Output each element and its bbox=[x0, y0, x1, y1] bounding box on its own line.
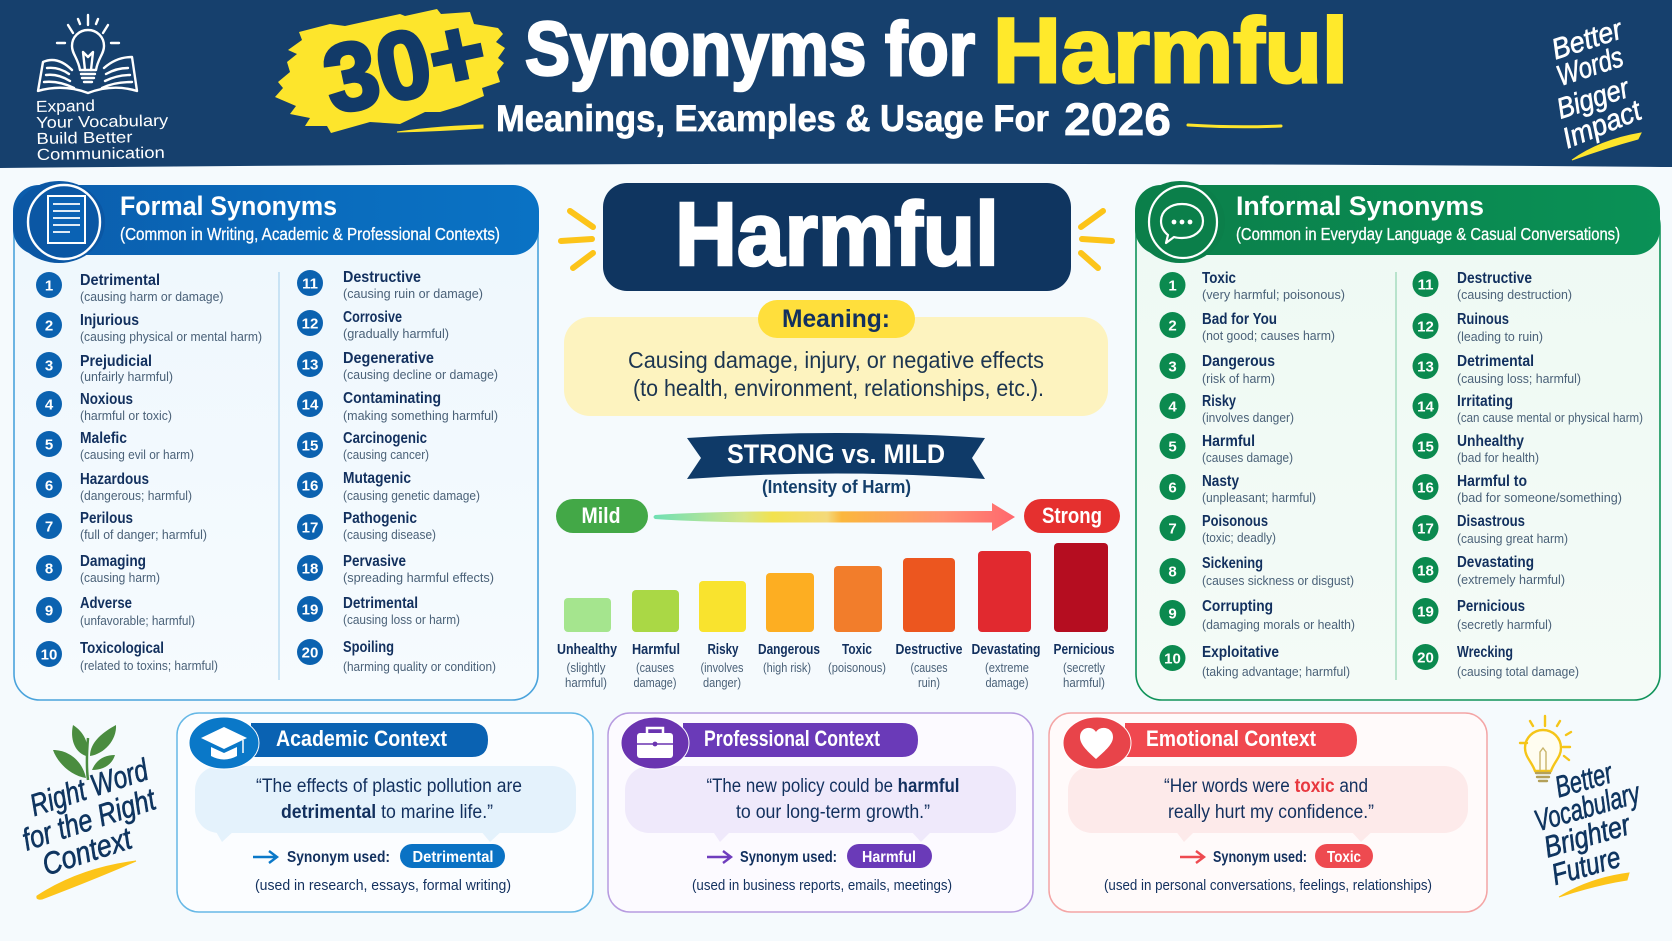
item 11: 11 bbox=[1418, 276, 1433, 294]
panel: meaning bbox=[564, 300, 1108, 416]
item 1: (very harmful; poisonous) bbox=[1202, 287, 1345, 302]
item 19 bbox=[297, 595, 460, 627]
title number: 30+ bbox=[315, 0, 495, 135]
item 10 bbox=[1160, 644, 1350, 679]
icon: speech bubble bbox=[1135, 181, 1225, 263]
heading: Academic Context bbox=[276, 726, 448, 751]
title text: Synonyms for bbox=[525, 7, 975, 92]
yellow brush highlight bbox=[275, 9, 505, 133]
slogan text: Better bbox=[1551, 756, 1617, 804]
bar: risky: danger) bbox=[703, 675, 741, 690]
slogan top right: Better bbox=[1548, 13, 1627, 66]
bar: destructive: Destructive bbox=[896, 641, 962, 658]
item 3: (unfairly harmful) bbox=[80, 369, 173, 384]
slogan top right: Impact bbox=[1558, 94, 1648, 155]
item 12: Corrosive bbox=[343, 309, 402, 326]
item 19 bbox=[1412, 598, 1552, 632]
meaning text bbox=[628, 347, 1044, 401]
bar: risky: (involves bbox=[700, 660, 744, 675]
item 3: Prejudicial bbox=[80, 353, 152, 370]
quote bbox=[256, 776, 522, 823]
arrow bbox=[707, 851, 731, 863]
speech bubble bbox=[1068, 766, 1468, 842]
item 4: Risky bbox=[1202, 393, 1236, 410]
synonym pill: Toxic bbox=[1327, 849, 1361, 866]
item 10: Exploitative bbox=[1202, 644, 1279, 661]
item 14: (making something harmful) bbox=[343, 408, 498, 423]
item 6: 6 bbox=[45, 478, 53, 494]
item 17: Pathogenic bbox=[343, 510, 417, 527]
item 4: (harmful or toxic) bbox=[80, 408, 172, 423]
item 15: (causing cancer) bbox=[343, 447, 429, 462]
item 16: 16 bbox=[1417, 480, 1434, 496]
item 20: (harming quality or condition) bbox=[343, 659, 496, 674]
item 2 bbox=[1160, 311, 1335, 343]
bar: toxic bbox=[828, 566, 886, 675]
item 9: (unfavorable; harmful) bbox=[80, 613, 195, 628]
item 5: Harmful bbox=[1202, 433, 1255, 450]
item 15: (bad for health) bbox=[1457, 450, 1539, 465]
item 13: Detrimental bbox=[1457, 353, 1534, 370]
item 16 bbox=[297, 470, 480, 503]
bar: devastating: (extreme bbox=[985, 660, 1029, 675]
slogan text bbox=[1531, 756, 1645, 892]
bar: harmful: (causes bbox=[636, 660, 674, 675]
item 13: 13 bbox=[1417, 358, 1434, 376]
quote: “Her words were toxic and bbox=[1164, 776, 1368, 797]
item 15 bbox=[297, 430, 429, 462]
item 1: 1 bbox=[45, 278, 53, 294]
icon: heart bbox=[1063, 717, 1131, 769]
item 18: 18 bbox=[302, 560, 318, 578]
slogan: right word bbox=[18, 725, 161, 899]
synonym pill bbox=[1315, 844, 1373, 868]
item 18: (spreading harmful effects) bbox=[343, 570, 494, 585]
item 9 bbox=[1160, 598, 1355, 632]
bar: risky bbox=[699, 581, 746, 690]
item 10 bbox=[36, 640, 218, 673]
item 18: Devastating bbox=[1457, 554, 1534, 571]
bar: dangerous: Dangerous bbox=[758, 641, 820, 658]
item 11: (causing ruin or damage) bbox=[343, 286, 483, 301]
item 12 bbox=[297, 309, 449, 341]
item 16: 16 bbox=[302, 478, 318, 494]
item 9: Adverse bbox=[80, 595, 132, 612]
item 6: (unpleasant; harmful) bbox=[1202, 490, 1316, 505]
item 19: 19 bbox=[1417, 604, 1434, 620]
item 17 bbox=[297, 510, 436, 542]
item 6: (dangerous; harmful) bbox=[80, 488, 192, 503]
bar: dangerous: (high risk) bbox=[763, 660, 811, 675]
item 2: (causing physical or mental harm) bbox=[80, 329, 262, 344]
informal heading: Informal Synonyms bbox=[1236, 191, 1484, 221]
gradient arrow bbox=[654, 503, 1015, 531]
item 11 bbox=[297, 269, 483, 301]
item 13: 13 bbox=[302, 356, 318, 374]
heading: Emotional Context bbox=[1146, 726, 1317, 751]
item 8: 8 bbox=[45, 560, 53, 578]
item 11: 11 bbox=[302, 276, 318, 292]
item 7: (full of danger; harmful) bbox=[80, 527, 207, 542]
meaning text: (to health, environment, relationships, etc.). bbox=[633, 375, 1044, 401]
item 10: 10 bbox=[41, 646, 57, 664]
item 3: (risk of harm) bbox=[1202, 371, 1275, 386]
quote: detrimental to marine life.” bbox=[281, 802, 493, 823]
item 7 bbox=[1160, 513, 1276, 545]
synonym pill: Detrimental bbox=[412, 849, 494, 866]
item 12: 12 bbox=[302, 316, 318, 332]
sparkle rays right bbox=[1081, 211, 1112, 268]
heading bar bbox=[251, 723, 488, 757]
bar: pernicious: Pernicious bbox=[1054, 641, 1114, 658]
meaning label: Meaning: bbox=[782, 305, 890, 333]
icon: briefcase bbox=[621, 717, 689, 769]
item 2: Injurious bbox=[80, 312, 139, 329]
speech bubble bbox=[625, 766, 1016, 842]
slogan text: Context bbox=[38, 820, 137, 882]
item 15: Carcinogenic bbox=[343, 430, 427, 447]
slogan text: for the Right bbox=[18, 781, 161, 857]
logo tagline: Build Better bbox=[36, 129, 133, 148]
item 2: Bad for You bbox=[1202, 311, 1277, 328]
synonym used label: Synonym used: bbox=[1213, 849, 1307, 866]
item 19: (secretly harmful) bbox=[1457, 617, 1552, 632]
item 13: Degenerative bbox=[343, 350, 434, 367]
item 10: Toxicological bbox=[80, 640, 164, 657]
item 14: (can cause mental or physical harm) bbox=[1457, 410, 1643, 425]
item 11: (causing destruction) bbox=[1457, 287, 1572, 302]
item 4: (involves danger) bbox=[1202, 410, 1294, 425]
header banner bbox=[0, 0, 1672, 168]
item 14: Irritating bbox=[1457, 393, 1513, 410]
item 13 bbox=[297, 350, 498, 382]
item 9: 9 bbox=[1168, 606, 1177, 622]
quote: to our long-term growth.” bbox=[736, 802, 930, 823]
bar: unhealthy: harmful) bbox=[565, 675, 607, 690]
bar: unhealthy: (slightly bbox=[566, 660, 606, 675]
formal heading: Formal Synonyms bbox=[120, 191, 337, 221]
item 8: (causing harm) bbox=[80, 570, 160, 585]
item 20: 20 bbox=[302, 644, 318, 662]
arrow bbox=[253, 851, 277, 863]
heading bar bbox=[683, 723, 918, 757]
bar: toxic: (poisonous) bbox=[828, 660, 886, 675]
icon: yellow bulb bbox=[1520, 716, 1571, 781]
panel: center headword bbox=[561, 183, 1112, 291]
item 1 bbox=[1160, 270, 1345, 302]
subtitle underline left bbox=[397, 125, 483, 132]
item 10: (related to toxins; harmful) bbox=[80, 658, 218, 673]
logo tagline bbox=[36, 97, 169, 164]
item 1: 1 bbox=[1168, 278, 1177, 294]
item 9: (damaging morals or health) bbox=[1202, 617, 1355, 632]
item 17: (causing great harm) bbox=[1457, 531, 1568, 546]
item 2 bbox=[36, 312, 262, 344]
item 16: (bad for someone/something) bbox=[1457, 490, 1622, 505]
item 8 bbox=[36, 553, 160, 585]
item 5: 5 bbox=[45, 436, 53, 454]
item 3: 3 bbox=[45, 358, 53, 374]
ribbon title: STRONG vs. MILD bbox=[727, 439, 945, 469]
strong pill: Strong bbox=[1042, 503, 1102, 528]
item 5 bbox=[36, 430, 194, 462]
mild pill: Mild bbox=[582, 503, 620, 528]
item 20: 20 bbox=[1417, 650, 1434, 666]
item 9: 9 bbox=[45, 602, 53, 620]
item 12: 12 bbox=[1417, 318, 1434, 336]
item 9: Corrupting bbox=[1202, 598, 1273, 615]
bar: unhealthy: Unhealthy bbox=[557, 641, 618, 658]
item 7: (toxic; deadly) bbox=[1202, 530, 1276, 545]
item 14 bbox=[1412, 393, 1643, 425]
item 7: 7 bbox=[1168, 520, 1177, 538]
item 18: Pervasive bbox=[343, 553, 406, 570]
sparkle rays left bbox=[561, 211, 593, 268]
item 20: Wrecking bbox=[1457, 644, 1513, 661]
item 20: (causing total damage) bbox=[1457, 664, 1579, 679]
item 6: 6 bbox=[1168, 480, 1177, 496]
item 3 bbox=[36, 352, 173, 384]
slogan text bbox=[18, 752, 161, 882]
bar: destructive bbox=[896, 558, 962, 690]
slogan text: Right Word bbox=[25, 752, 154, 823]
item 18 bbox=[297, 553, 494, 585]
item 6 bbox=[36, 471, 192, 503]
item 5: (causes damage) bbox=[1202, 450, 1293, 465]
icon: graduation cap bbox=[189, 717, 259, 769]
item 4: Noxious bbox=[80, 391, 133, 408]
speech bubble bbox=[195, 766, 576, 842]
item 9 bbox=[36, 595, 195, 628]
quote bbox=[1164, 776, 1374, 823]
item 8: (causes sickness or disgust) bbox=[1202, 573, 1354, 588]
item 17: (causing disease) bbox=[343, 527, 436, 542]
formal subheading: (Common in Writing, Academic & Professional Contexts) bbox=[120, 224, 500, 244]
title keyword: Harmful bbox=[993, 0, 1348, 102]
icon: book with light bulb bbox=[38, 15, 137, 93]
slogan text: Future bbox=[1548, 841, 1624, 892]
subtitle year: 2026 bbox=[1064, 94, 1171, 145]
item 14: 14 bbox=[1417, 398, 1434, 416]
heading: Professional Context bbox=[704, 726, 881, 751]
item 13: (causing loss; harmful) bbox=[1457, 371, 1581, 386]
item 19: Detrimental bbox=[343, 595, 418, 612]
usage note: (used in personal conversations, feelings, relationships) bbox=[1104, 877, 1432, 894]
formal header bar bbox=[13, 185, 539, 255]
heading bar bbox=[1125, 723, 1357, 757]
item 12: (gradually harmful) bbox=[343, 326, 449, 341]
bar: risky: Risky bbox=[708, 641, 739, 658]
synonym used label: Synonym used: bbox=[287, 849, 390, 866]
item 8 bbox=[1160, 555, 1354, 588]
subtitle: Meanings, Examples & Usage For bbox=[496, 98, 1049, 139]
item 3: Dangerous bbox=[1202, 353, 1275, 370]
informal header bar bbox=[1135, 185, 1660, 255]
item 5: Malefic bbox=[80, 430, 127, 447]
strong pill bbox=[1024, 499, 1120, 533]
item 5 bbox=[1160, 433, 1293, 465]
meaning text: Causing damage, injury, or negative effects bbox=[628, 347, 1044, 373]
item 14 bbox=[297, 390, 498, 423]
bar: devastating bbox=[972, 551, 1040, 690]
item 12 bbox=[1412, 311, 1543, 344]
item 1 bbox=[36, 272, 224, 304]
item 12: (leading to ruin) bbox=[1457, 329, 1543, 344]
headword: Harmful bbox=[675, 185, 999, 285]
bar: harmful: damage) bbox=[634, 675, 676, 690]
item 8: 8 bbox=[1168, 564, 1177, 580]
item 13 bbox=[1412, 353, 1581, 386]
item 12: Ruinous bbox=[1457, 311, 1509, 328]
headword box bbox=[603, 183, 1071, 291]
item 11 bbox=[1412, 270, 1572, 302]
item 2: 2 bbox=[1168, 318, 1177, 334]
item 2: (not good; causes harm) bbox=[1202, 328, 1335, 343]
item 18 bbox=[1412, 554, 1565, 587]
yellow stroke bbox=[1559, 873, 1629, 897]
item 18: (extremely harmful) bbox=[1457, 572, 1565, 587]
mild pill bbox=[556, 499, 648, 533]
item 6 bbox=[1160, 473, 1316, 505]
bar: toxic: Toxic bbox=[842, 641, 872, 658]
yellow stroke bbox=[37, 861, 136, 899]
bar: harmful bbox=[632, 590, 680, 690]
slogan top right bbox=[1548, 13, 1648, 160]
subtitle underline right bbox=[1188, 125, 1281, 127]
item 4 bbox=[36, 391, 172, 423]
item 19: (causing loss or harm) bbox=[343, 612, 460, 627]
item 2: 2 bbox=[45, 318, 53, 334]
synonym used label: Synonym used: bbox=[740, 849, 837, 866]
item 15 bbox=[1412, 433, 1539, 465]
item 20: Spoiling bbox=[343, 639, 394, 656]
item 7: Perilous bbox=[80, 510, 133, 527]
item 7: 7 bbox=[45, 518, 53, 536]
bar: pernicious bbox=[1054, 543, 1114, 690]
ribbon banner bbox=[687, 433, 985, 479]
item 20 bbox=[1412, 644, 1579, 679]
quote: “The new policy could be harmful bbox=[706, 776, 960, 797]
meaning pill bbox=[758, 300, 915, 338]
synonym pill: Harmful bbox=[862, 849, 916, 866]
item 16 bbox=[1412, 473, 1622, 505]
item 20 bbox=[297, 639, 496, 674]
logo tagline: Expand bbox=[36, 98, 95, 116]
item 15: 15 bbox=[1417, 438, 1434, 456]
item 19: 19 bbox=[302, 602, 318, 618]
item 14: 14 bbox=[302, 396, 319, 414]
item 10: (taking advantage; harmful) bbox=[1202, 664, 1350, 679]
panel: informal synonyms bbox=[1135, 181, 1660, 700]
usage note: (used in research, essays, formal writing) bbox=[255, 877, 511, 894]
synonym pill bbox=[400, 844, 505, 868]
item 15: 15 bbox=[302, 438, 318, 454]
ribbon subtitle: (Intensity of Harm) bbox=[762, 477, 911, 497]
slogan top right: Words bbox=[1553, 41, 1627, 93]
item 17: 17 bbox=[1417, 520, 1434, 538]
slogan text: Brighter bbox=[1540, 808, 1635, 864]
item 15: Unhealthy bbox=[1457, 433, 1524, 450]
panel: formal synonyms bbox=[13, 181, 539, 700]
bar: devastating: Devastating bbox=[972, 641, 1040, 658]
item 19: Pernicious bbox=[1457, 598, 1525, 615]
bar: pernicious: (secretly bbox=[1063, 660, 1105, 675]
logo tagline: Communication bbox=[37, 145, 165, 164]
bar: destructive: ruin) bbox=[918, 675, 940, 690]
quote: “The effects of plastic pollution are bbox=[256, 776, 522, 797]
item 13: (causing decline or damage) bbox=[343, 367, 498, 382]
synonym pill bbox=[847, 844, 932, 868]
item 17 bbox=[1412, 513, 1568, 546]
bar: destructive: (causes bbox=[910, 660, 948, 675]
item 6: Hazardous bbox=[80, 471, 149, 488]
item 8: Sickening bbox=[1202, 555, 1263, 572]
item 1: Toxic bbox=[1202, 270, 1236, 287]
bar: dangerous bbox=[758, 573, 820, 675]
slogan: better vocabulary bbox=[1520, 716, 1645, 897]
bar: harmful: Harmful bbox=[632, 641, 680, 658]
item 7: Poisonous bbox=[1202, 513, 1268, 530]
card: professional context bbox=[608, 713, 1033, 912]
bar: pernicious: harmful) bbox=[1063, 675, 1105, 690]
quote: really hurt my confidence.” bbox=[1168, 802, 1374, 823]
item 16: (causing genetic damage) bbox=[343, 488, 480, 503]
quote bbox=[706, 776, 960, 823]
usage note: (used in business reports, emails, meetings) bbox=[692, 877, 952, 894]
item 11: Destructive bbox=[1457, 270, 1532, 287]
card: emotional context bbox=[1049, 713, 1487, 912]
bar chart bbox=[557, 543, 1114, 690]
item 18: 18 bbox=[1417, 562, 1434, 580]
bar: unhealthy bbox=[557, 598, 618, 690]
item 14: Contaminating bbox=[343, 390, 441, 407]
item 10: 10 bbox=[1164, 650, 1181, 668]
item 16: Mutagenic bbox=[343, 470, 411, 487]
item 1: Detrimental bbox=[80, 272, 160, 289]
item 4: 4 bbox=[1168, 398, 1177, 416]
item 4 bbox=[1160, 393, 1294, 425]
card: academic context bbox=[177, 713, 593, 912]
item 3 bbox=[1160, 353, 1275, 386]
item 8: Damaging bbox=[80, 553, 146, 570]
item 1: (causing harm or damage) bbox=[80, 289, 224, 304]
item 5: (causing evil or harm) bbox=[80, 447, 194, 462]
item 5: 5 bbox=[1168, 438, 1177, 456]
arrow bbox=[1180, 851, 1204, 863]
panel: strong vs mild scale bbox=[556, 433, 1120, 690]
item 6: Nasty bbox=[1202, 473, 1239, 490]
item 3: 3 bbox=[1168, 358, 1177, 376]
item 17: 17 bbox=[302, 520, 318, 536]
item 16: Harmful to bbox=[1457, 473, 1527, 490]
bar: devastating: damage) bbox=[986, 675, 1028, 690]
item 4: 4 bbox=[45, 396, 54, 414]
item 11: Destructive bbox=[343, 269, 421, 286]
icon: document bbox=[13, 181, 105, 263]
logo tagline: Your Vocabulary bbox=[36, 113, 168, 132]
item 17: Disastrous bbox=[1457, 513, 1525, 530]
slogan top right: Bigger bbox=[1553, 72, 1634, 126]
icon: plant bbox=[53, 725, 116, 780]
item 7 bbox=[36, 510, 207, 542]
